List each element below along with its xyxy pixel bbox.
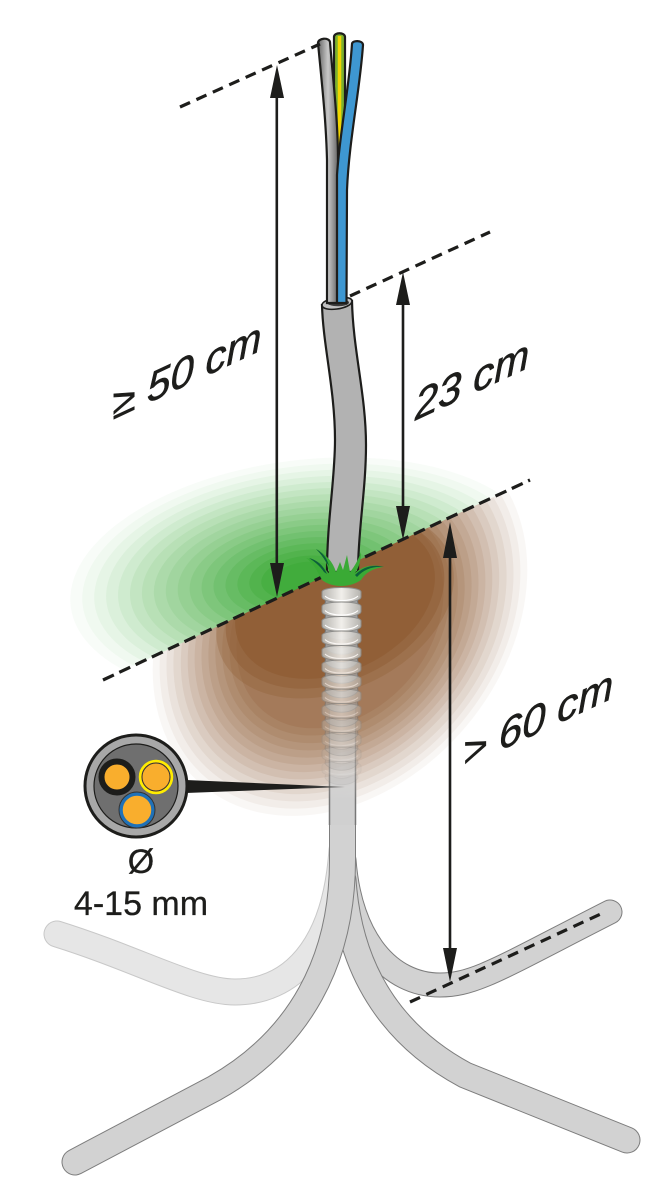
arrow: 50 cm dimension (270, 65, 284, 597)
top dashed reference line (180, 44, 320, 107)
black conductor (102, 762, 132, 792)
lower cable trunk (330, 690, 356, 825)
corrugated conduit (322, 588, 361, 785)
cable cross-section (85, 735, 187, 837)
label: 23 cm: 23 cm (414, 330, 529, 431)
middle dashed reference line (350, 232, 490, 296)
grey neutral wire (318, 39, 338, 303)
back right branch (344, 860, 610, 985)
front right branch (343, 880, 627, 1140)
outer cable sheath (322, 297, 366, 572)
green-yellow earth wire (334, 33, 345, 170)
arrow: 23 cm dimension (396, 272, 410, 540)
diameter label: 4-15 mm (74, 885, 208, 923)
back left branch (faded) (57, 850, 342, 992)
diameter label (74, 843, 208, 923)
blue live wire (337, 41, 363, 303)
yellow conductor (140, 761, 172, 793)
bottom dashed reference line (410, 912, 605, 1002)
label: 50 cm: ≥ 50 cm (112, 313, 262, 429)
arrow: 60 cm dimension (443, 522, 457, 982)
ground surface dashed line (103, 480, 530, 680)
grass tuft (306, 549, 384, 586)
label: 60 cm: > 60 cm (463, 661, 613, 778)
diameter label: Ø (128, 843, 154, 881)
callout pointer (186, 780, 345, 793)
individual wires (318, 33, 363, 303)
green grass gradient patch (82, 464, 488, 666)
blue conductor (119, 792, 155, 828)
front left branch (75, 816, 342, 1162)
brown soil gradient patch (153, 491, 527, 816)
